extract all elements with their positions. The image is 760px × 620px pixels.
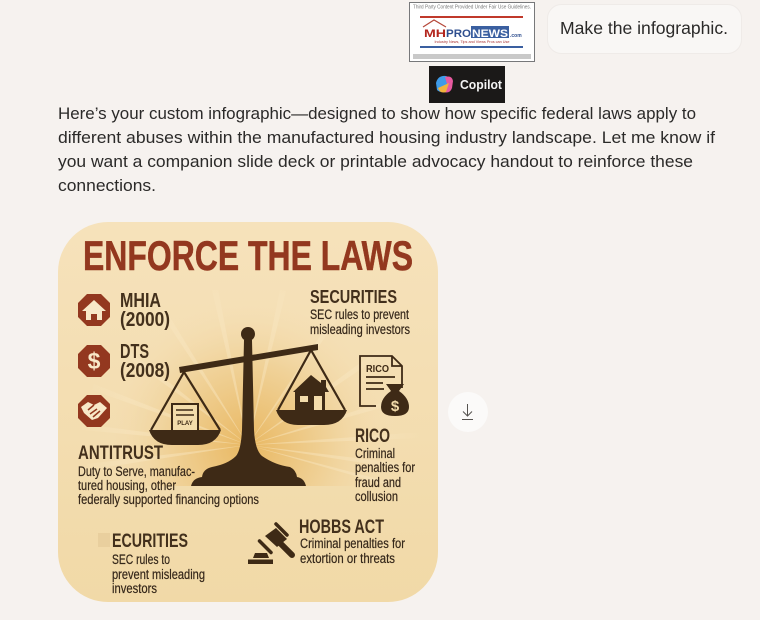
item: SECURITIES bottom: SEC rules to — [112, 552, 170, 567]
right pan with house — [276, 350, 347, 425]
logo: MHProNews: NEWS — [472, 28, 508, 40]
item: SECURITIES top — [310, 287, 410, 337]
item: ANTITRUST: federally supported financing options — [78, 492, 259, 507]
icon: RICO document and money bag: RICO — [366, 363, 389, 375]
response paragraph — [58, 104, 715, 195]
item: HOBBS ACT: HOBBS ACT — [299, 517, 384, 538]
item: DTS: (2008) — [120, 360, 170, 382]
item: SECURITIES bottom: prevent misleading — [112, 567, 205, 582]
icon: handshake badge — [78, 395, 110, 427]
response paragraph: different abuses within the manufactured housing industry landscape. Let me know if — [58, 128, 715, 147]
logo: MHProNews: Third Party Content Provided Under Fair Use Guidelines. — [413, 4, 531, 10]
scale stand — [191, 340, 306, 486]
item: SECURITIES top: SECURITIES — [310, 287, 397, 307]
item: MHIA: MHIA — [120, 290, 161, 312]
response paragraph: you want a companion slide deck or printable advocacy handout to reinforce these — [58, 152, 693, 171]
logo: Copilot — [429, 66, 505, 103]
item: ANTITRUST: Duty to Serve, manufac- — [78, 464, 195, 479]
item: DTS: DTS — [120, 341, 149, 363]
logo: MHProNews: MH — [424, 28, 446, 40]
logo: MHProNews: Industry News, Tips and Views Pros can Use — [434, 39, 510, 44]
user message bubble — [548, 4, 742, 54]
item: SECURITIES bottom — [98, 531, 205, 596]
item: SECURITIES bottom: investors — [112, 581, 157, 596]
item: HOBBS ACT: Criminal penalties for — [300, 536, 405, 551]
icon: download button — [448, 392, 488, 432]
item: RICO: RICO — [355, 426, 390, 447]
panel: infographic card — [58, 222, 438, 602]
item: RICO — [355, 426, 415, 504]
item: ANTITRUST: tured housing, other — [78, 478, 176, 493]
icon: gavel — [248, 524, 292, 564]
item: RICO: Criminal — [355, 446, 395, 461]
item: ANTITRUST: ANTITRUST — [78, 443, 163, 464]
left pan: PLAY — [177, 421, 193, 427]
chart: balance scale — [149, 327, 347, 486]
logo: MHProNews — [410, 2, 534, 62]
item: RICO: penalties for — [355, 460, 415, 475]
item: HOBBS ACT: extortion or threats — [300, 551, 395, 566]
item: HOBBS ACT — [299, 517, 405, 566]
icon: house badge — [78, 294, 110, 326]
user message bubble: Make the infographic. — [560, 18, 728, 38]
icon: RICO document and money bag: $ — [391, 398, 400, 415]
logo: MHProNews: PRO — [446, 28, 471, 40]
item: MHIA — [120, 290, 170, 331]
item: SECURITIES bottom: ECURITIES — [112, 531, 188, 552]
icon: dollar badge: $ — [88, 348, 101, 374]
item: ANTITRUST — [78, 443, 259, 507]
item: RICO: fraud and — [355, 475, 401, 490]
sunburst background — [142, 332, 370, 486]
response paragraph: Here’s your custom infographic—designed to show how specific federal laws apply to — [58, 104, 696, 123]
item: DTS — [120, 341, 170, 382]
response paragraph: connections. — [58, 176, 156, 195]
icon: RICO document and money bag — [360, 356, 409, 416]
item: SECURITIES top: SEC rules to prevent — [310, 307, 409, 322]
item: SECURITIES top: misleading investors — [310, 322, 410, 337]
scale beam — [179, 344, 318, 373]
title: ENFORCE THE LAWS — [83, 232, 413, 279]
left pan — [149, 372, 221, 445]
item: RICO: collusion — [355, 489, 398, 504]
logo: MHProNews: .com — [510, 33, 522, 39]
logo: Copilot: Copilot — [460, 78, 503, 92]
icon: dollar badge — [78, 345, 110, 377]
item: MHIA: (2000) — [120, 309, 170, 331]
